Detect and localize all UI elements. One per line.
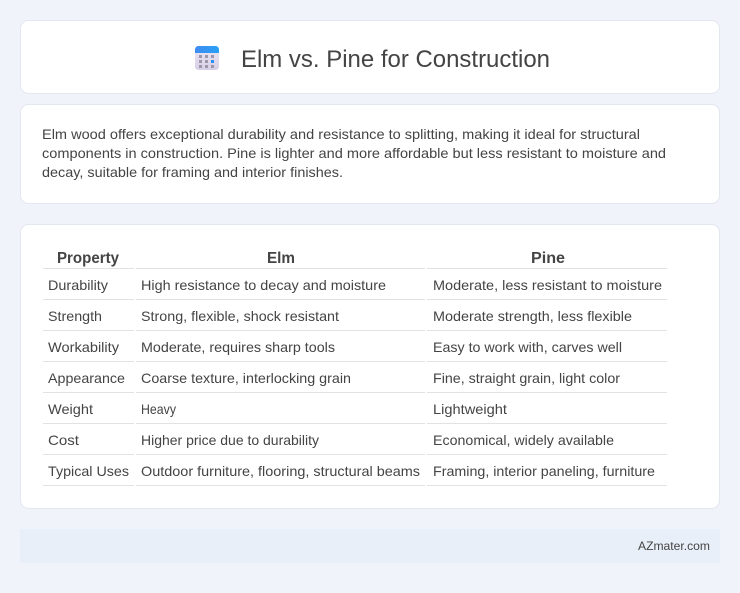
title: Elm vs. Pine for Construction [241, 46, 550, 73]
row: weight: Heavy [141, 401, 176, 417]
row: weight [48, 401, 507, 417]
intro text: components in construction. Pine is lighter and more affordable but less resistant to moisture and [42, 145, 666, 161]
row: typical uses [48, 463, 655, 479]
row: appearance: Coarse texture, interlocking grain [141, 370, 351, 386]
header panel [20, 20, 720, 94]
row: durability: High resistance to decay and moisture [141, 277, 386, 293]
table header row: Elm [267, 250, 295, 267]
row: workability: Easy to work with, carves well [433, 339, 622, 355]
footer bar [20, 529, 720, 563]
row: typical uses: Framing, interior paneling, furniture [433, 463, 655, 479]
row: strength: Moderate strength, less flexible [433, 308, 632, 324]
row: typical uses: Typical Uses [48, 463, 129, 479]
row: strength: Strong, flexible, shock resistant [141, 308, 339, 324]
row: workability [48, 339, 622, 355]
row: weight: Lightweight [433, 401, 507, 417]
row: appearance: Appearance [48, 370, 125, 386]
table header row [57, 250, 565, 267]
row: strength [48, 308, 632, 324]
row: cost: Cost [48, 432, 79, 448]
row: appearance [48, 370, 620, 386]
intro text: decay, suitable for framing and interior finishes. [42, 164, 343, 180]
icon: calendar [195, 46, 219, 70]
intro text: Elm wood offers exceptional durability and resistance to splitting, making it ideal for structural [42, 126, 640, 142]
row: durability: Moderate, less resistant to moisture [433, 277, 662, 293]
row: cost: Higher price due to durability [141, 432, 319, 448]
footer credit: AZmater.com [638, 539, 710, 553]
row: workability: Moderate, requires sharp tools [141, 339, 335, 355]
row: durability: Durability [48, 277, 108, 293]
row: strength: Strength [48, 308, 102, 324]
intro panel [20, 104, 720, 204]
row: durability [48, 277, 662, 293]
row: typical uses: Outdoor furniture, flooring, structural beams [141, 463, 420, 479]
intro text [42, 126, 666, 180]
row: workability: Workability [48, 339, 119, 355]
row: cost [48, 432, 614, 448]
row: appearance: Fine, straight grain, light color [433, 370, 620, 386]
table header row: Pine [531, 250, 565, 267]
table panel [20, 224, 720, 508]
table header row: Property [57, 250, 119, 267]
row: cost: Economical, widely available [433, 432, 614, 448]
row: weight: Weight [48, 401, 93, 417]
